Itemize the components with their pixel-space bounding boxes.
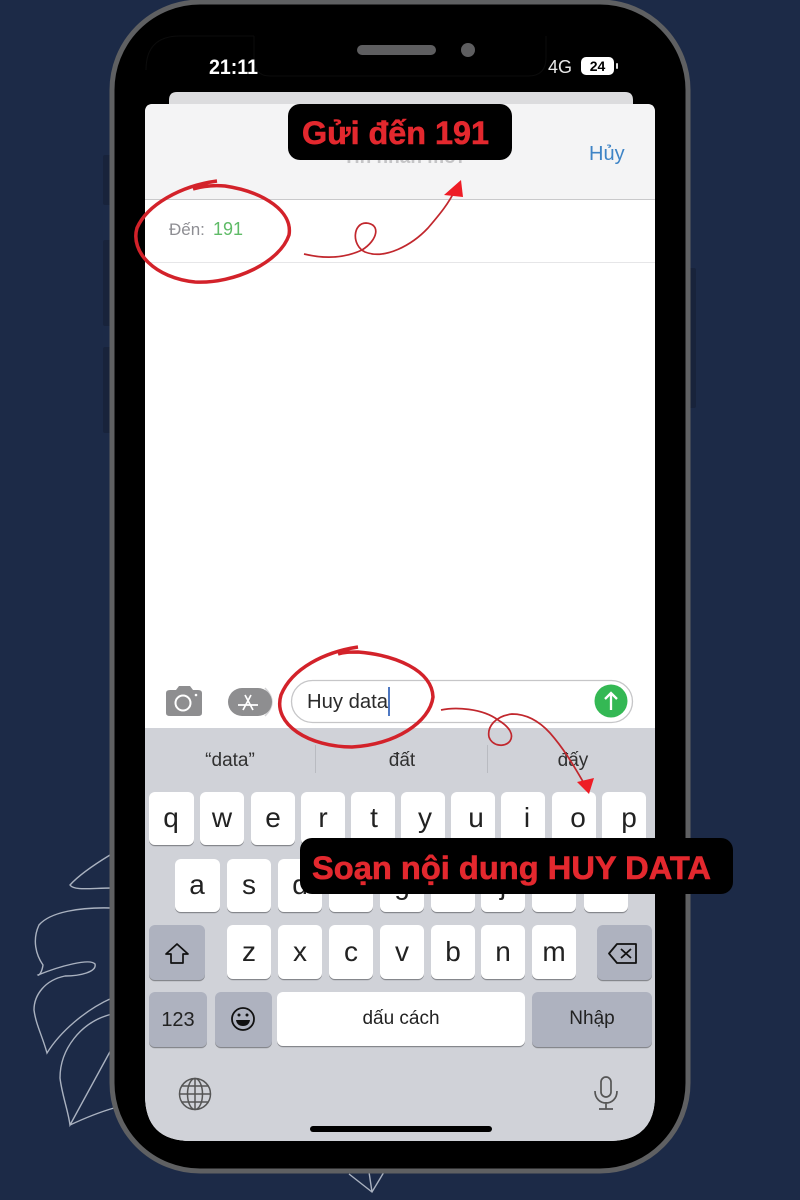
network label: 4G <box>548 57 572 77</box>
phone side buttons <box>103 155 696 433</box>
suggestions <box>205 750 589 771</box>
key labels: dấu cách <box>362 1008 440 1029</box>
arrow: to keyboard <box>441 709 594 794</box>
arrow: to callout <box>304 180 463 257</box>
message screen <box>145 104 655 1141</box>
notch <box>146 36 546 76</box>
cancel link: Hủy <box>589 143 625 165</box>
key labels: z <box>242 936 256 967</box>
recipient field: 191 <box>213 219 243 239</box>
input text: Huy data <box>307 691 389 713</box>
key labels: r <box>318 802 328 833</box>
callout: compose HUY DATA: Soạn nội dung HUY DATA <box>312 850 711 886</box>
speaker <box>357 45 436 55</box>
back sheet <box>169 92 633 104</box>
key labels: y <box>418 802 432 833</box>
key labels: m <box>542 936 566 967</box>
key labels: g <box>394 869 410 900</box>
key labels: e <box>265 802 281 833</box>
phone body <box>112 2 688 1171</box>
message input <box>292 680 632 722</box>
hand-drawn circle: message text <box>280 647 433 747</box>
key labels: c <box>344 936 358 967</box>
sheet header <box>145 104 655 199</box>
suggestions: “data” <box>205 750 255 771</box>
icon: globe <box>180 1078 210 1110</box>
key labels: x <box>293 936 307 967</box>
key labels: f <box>347 869 355 900</box>
icon: emoji <box>232 1008 254 1030</box>
key labels: i <box>524 802 530 833</box>
key labels: p <box>621 802 637 833</box>
cursor <box>388 687 390 716</box>
icon: microphone <box>595 1077 617 1109</box>
icon: delete <box>609 944 636 963</box>
hand-drawn circle: recipient <box>136 181 289 282</box>
callout: compose HUY DATA <box>300 838 733 894</box>
key labels: v <box>395 936 409 967</box>
header title: Tin nhắn mới <box>343 146 463 168</box>
screen white base <box>145 104 655 1141</box>
key labels: u <box>468 802 484 833</box>
camera icon <box>166 686 202 716</box>
key labels: q <box>163 802 179 833</box>
suggestions: đấy <box>558 750 589 771</box>
keyboard background <box>145 728 655 1141</box>
send button <box>594 684 628 718</box>
suggestions: đất <box>389 750 416 771</box>
time: 21:11 <box>209 55 258 79</box>
key labels: w <box>211 802 233 833</box>
letter keys <box>149 792 652 1047</box>
key labels: s <box>242 869 256 900</box>
camera <box>461 43 475 57</box>
icon: shift <box>166 944 188 963</box>
key labels <box>161 802 637 1031</box>
key labels: o <box>570 802 586 833</box>
battery: 24 <box>590 58 605 74</box>
app store icon <box>228 688 272 716</box>
key labels: Nhập <box>569 1008 615 1029</box>
key labels: h <box>445 869 461 900</box>
callout: send to 191 <box>288 104 512 160</box>
callout: send to 191: Gửi đến 191 <box>302 115 489 151</box>
key labels: l <box>603 869 609 900</box>
key labels: a <box>189 869 205 900</box>
key labels: j <box>499 869 506 900</box>
key labels: b <box>445 936 461 967</box>
key labels: 123 <box>161 1009 195 1031</box>
key labels: d <box>292 869 308 900</box>
status bar <box>209 55 618 79</box>
key labels: t <box>370 802 378 833</box>
battery <box>581 57 618 75</box>
home indicator <box>310 1126 492 1132</box>
key labels: n <box>495 936 511 967</box>
decorative leaf outline <box>34 855 384 1192</box>
recipient field: Đến: <box>169 220 205 239</box>
keyboard <box>145 728 655 1141</box>
key labels: k <box>547 869 562 900</box>
